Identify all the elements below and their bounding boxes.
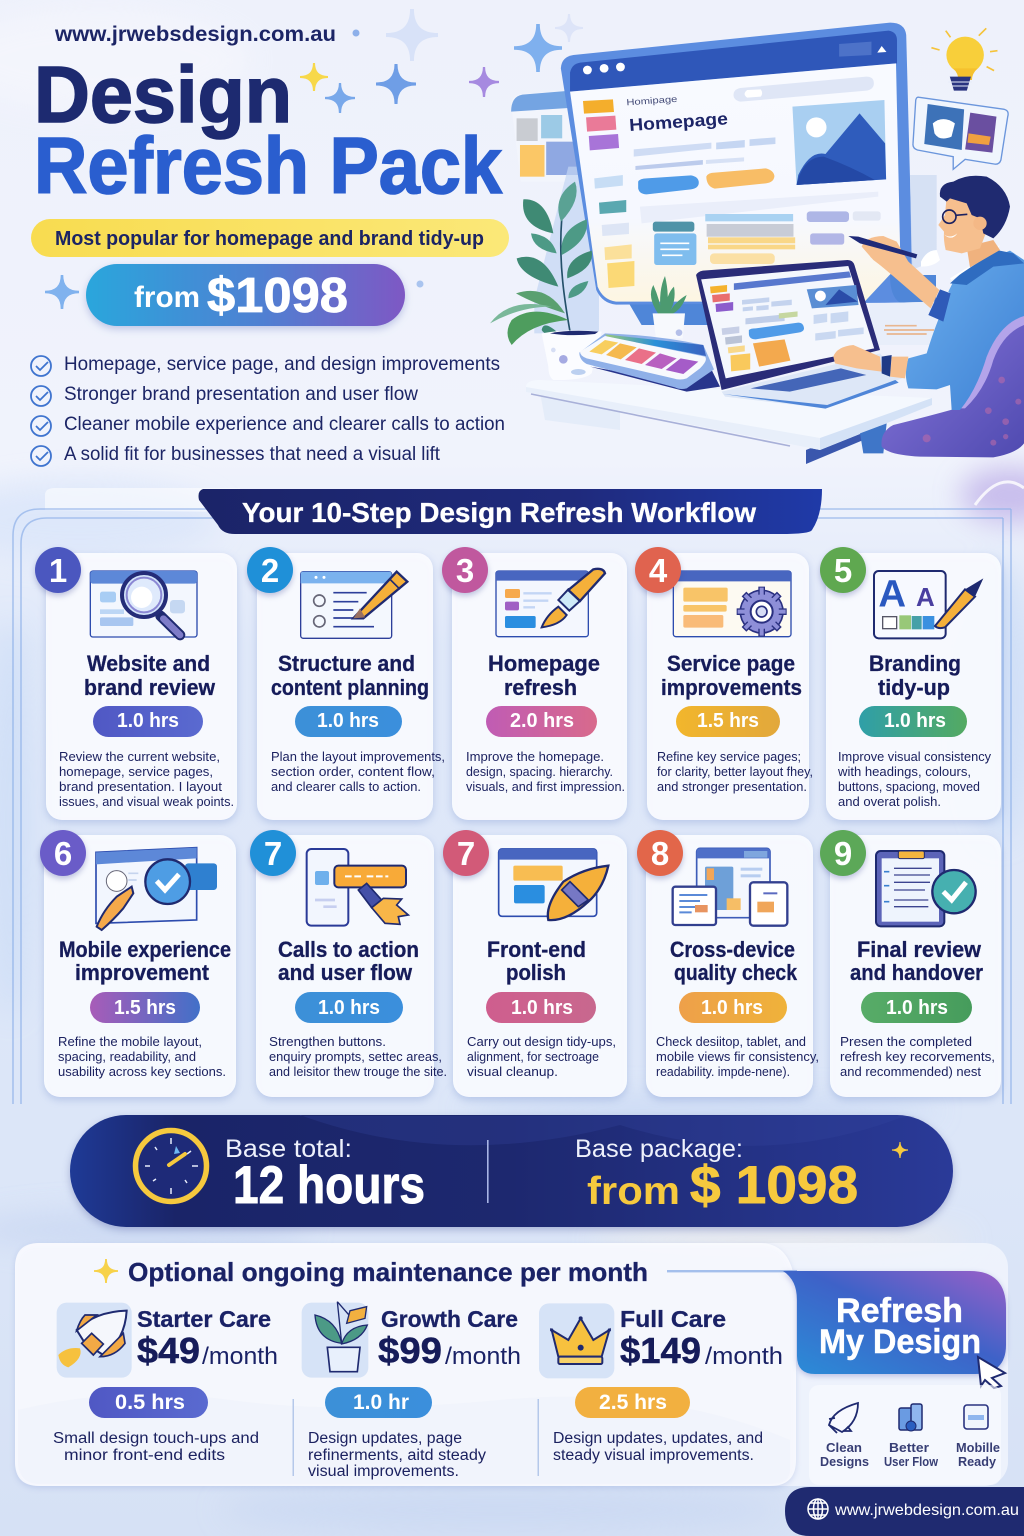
- card 2: content planning: [271, 675, 429, 700]
- card 1: issues, and visual weak points.: [59, 794, 234, 809]
- card 1: [35, 547, 237, 820]
- price pill: [86, 264, 405, 326]
- workflow banner: [198, 489, 822, 534]
- section heading: Optional ongoing maintenance per month: [128, 1257, 648, 1287]
- card 3: Homepage: [488, 651, 600, 676]
- card 3: design, spacing. hierarchy.: [466, 764, 613, 779]
- card 2: Plan the layout improvements,: [271, 749, 445, 764]
- plan: full care: Design updates, updates, and: [553, 1430, 763, 1447]
- plant: [490, 182, 592, 345]
- card 10: Final review: [857, 937, 982, 962]
- card 5: tidy-up: [878, 675, 950, 700]
- card 6: Refine the mobile layout,: [58, 1034, 202, 1049]
- monitor: Homipage: [626, 94, 678, 107]
- base total banner: Base total:: [225, 1135, 352, 1163]
- raised arm and pen: [870, 257, 939, 308]
- card 3: [442, 547, 627, 820]
- plan: full care: /month: [705, 1343, 783, 1370]
- card 5: Improve visual consistency: [838, 749, 991, 764]
- price pill: from: [134, 281, 200, 314]
- icon: cursor: [978, 1357, 1005, 1388]
- small plant: [651, 276, 687, 338]
- card 2: 1.0 hrs: [317, 710, 379, 732]
- icon: rocket: [57, 1303, 132, 1378]
- card 9: Check desiitop, tablet, and: [656, 1034, 806, 1049]
- feature: better user flow: Better: [889, 1440, 929, 1455]
- card 3: 2.0 hrs: [510, 710, 574, 732]
- desk: [526, 380, 932, 464]
- feature checklist: A solid fit for businesses that need a visual lift: [64, 444, 441, 465]
- feature: clean designs: [820, 1403, 869, 1469]
- plan: growth care: [302, 1302, 521, 1480]
- card 7: enquiry prompts, settec areas,: [269, 1049, 442, 1064]
- plan: growth care: 1.0 hr: [353, 1391, 409, 1414]
- base total banner: 12 hours: [233, 1156, 425, 1215]
- icon: clock: [136, 1130, 206, 1202]
- card 10: 9: [834, 835, 852, 872]
- card 6: improvement: [75, 960, 210, 985]
- card 10: and recommended) nest: [840, 1064, 981, 1079]
- speech bubble with app tiles: [913, 97, 1008, 169]
- body and shirt: [906, 251, 1024, 410]
- plant pot: [542, 330, 602, 380]
- icon: cross-device check: [673, 848, 787, 926]
- workflow panel frame: [13, 509, 1011, 1104]
- card 1: Website and: [87, 651, 210, 676]
- card 8: polish: [506, 960, 566, 985]
- icon: service page gear: [673, 571, 791, 637]
- card 8: [443, 830, 627, 1097]
- card 2: section order, content flow,: [271, 764, 435, 779]
- plan: growth care: $99: [378, 1330, 442, 1371]
- plan: starter care: 0.5 hrs: [115, 1391, 185, 1414]
- icon: front-end polish: [499, 849, 608, 920]
- icon: calls to action: [307, 849, 408, 926]
- card 7: 1.0 hrs: [318, 997, 380, 1019]
- card 1: brand presentation. I layout: [59, 779, 222, 794]
- designer in chair: [833, 176, 1024, 457]
- step cards row two: [40, 830, 1001, 1097]
- card 7: 7: [264, 835, 282, 872]
- chair: [860, 316, 1024, 457]
- plan: starter care: Starter Care: [137, 1306, 271, 1332]
- base total banner: [70, 1115, 953, 1227]
- card 9: 8: [651, 835, 669, 872]
- card 2: and clearer calls to action.: [271, 779, 421, 794]
- plan: growth care: Growth Care: [381, 1306, 518, 1332]
- footer website badge: www.jrwebdesign.com.au: [834, 1502, 1019, 1519]
- plan: starter care: minor front-end edits: [64, 1447, 225, 1464]
- card 10: refresh key recorvements,: [840, 1049, 995, 1064]
- icon: final review clipboard: [876, 851, 976, 926]
- card 4: [635, 547, 813, 820]
- laptop: [696, 260, 902, 409]
- card 2: Structure and: [278, 651, 415, 676]
- back window with colour tiles: [511, 90, 579, 182]
- icon: globe: [808, 1499, 828, 1519]
- card 9: [637, 830, 819, 1097]
- call to action button: [783, 1271, 1006, 1388]
- card 8: Front-end: [487, 937, 586, 962]
- card 8: Carry out design tidy-ups,: [467, 1034, 616, 1049]
- decorative sparkles: [45, 9, 583, 309]
- card 4: Service page: [667, 651, 795, 676]
- card 4: 4: [649, 552, 668, 589]
- call to action button: Refresh: [836, 1292, 963, 1330]
- card 5: Branding: [869, 651, 961, 676]
- card 3: 3: [456, 552, 474, 589]
- icon: crown: [539, 1303, 614, 1378]
- feature: better user flow: [884, 1404, 939, 1469]
- small paper note: [921, 250, 940, 267]
- card 6: Mobile experience: [59, 937, 231, 962]
- card 5: and overat polish.: [838, 794, 941, 809]
- head: [967, 240, 1000, 267]
- card 10: [820, 830, 1001, 1097]
- card 6: spacing, readability, and: [58, 1049, 196, 1064]
- card 7: Calls to action: [278, 937, 419, 962]
- feature: better user flow: User Flow: [884, 1454, 939, 1469]
- card 10: 1.0 hrs: [886, 997, 948, 1019]
- workflow banner: Your 10-Step Design Refresh Workflow: [242, 497, 756, 528]
- card 5: 1.0 hrs: [884, 710, 946, 732]
- card 9: 1.0 hrs: [701, 997, 763, 1019]
- plan: starter care: [53, 1303, 278, 1464]
- icon: homepage brush: [496, 569, 605, 637]
- icon: website review: [90, 571, 197, 637]
- feature checklist: [31, 354, 505, 466]
- card 4: and stronger presentation.: [657, 779, 807, 794]
- plan: growth care: Design updates, page: [308, 1430, 462, 1447]
- title: Refresh Pack: [34, 121, 502, 210]
- card 6: 1.5 hrs: [114, 997, 176, 1019]
- card 6: 6: [54, 835, 72, 872]
- plan: full care: $149: [620, 1330, 701, 1371]
- card 2: 2: [261, 552, 279, 589]
- card 5: buttons, spaciong, moved: [838, 779, 980, 794]
- card 1: 1.0 hrs: [117, 710, 179, 732]
- card 1: brand review: [84, 675, 216, 700]
- card 3: visuals, and first impression.: [466, 779, 625, 794]
- base total banner: Base package:: [575, 1135, 743, 1163]
- hero illustration: designer at desk: [490, 23, 1024, 464]
- items beside monitor: [869, 175, 937, 345]
- title: [34, 50, 502, 210]
- tagline pill: Most popular for homepage and brand tidy-up: [55, 228, 484, 250]
- card 5: [820, 547, 1001, 820]
- card 10: and handover: [850, 960, 983, 985]
- plan: starter care: /month: [202, 1343, 278, 1370]
- feature: clean designs: Designs: [820, 1454, 869, 1469]
- light bulb: [931, 28, 997, 91]
- card 7: Strengthen buttons.: [269, 1034, 386, 1049]
- resting hand and watch: [833, 345, 882, 372]
- card 7: and leisitor thew trouge the site.: [269, 1064, 447, 1079]
- feature checklist: Cleaner mobile experience and clearer calls to action: [64, 414, 505, 435]
- plan: starter care: $49: [137, 1330, 200, 1371]
- feature: mobile ready: [956, 1405, 1000, 1469]
- website address: www.jrwebsdesign.com.au: [54, 23, 336, 46]
- icon: mobile experience: [96, 848, 217, 930]
- icon: branding typography: A: [878, 573, 906, 616]
- card 4: for clarity, better layout fhey,: [657, 764, 813, 779]
- card 8: alignment, for sectroage: [467, 1049, 599, 1064]
- icon: structure planning: [301, 572, 407, 638]
- call to action button: My Design: [819, 1323, 981, 1361]
- title: Design: [34, 50, 292, 139]
- monitor: [561, 23, 913, 325]
- plan: full care: steady visual improvements.: [553, 1447, 754, 1464]
- card 8: visual cleanup.: [467, 1064, 558, 1079]
- plan: growth care: refinerments, aitd steady: [308, 1447, 486, 1464]
- card 1: Review the current website,: [59, 749, 220, 764]
- plan: full care: 2.5 hrs: [599, 1391, 667, 1414]
- card 3: Improve the homepage.: [466, 749, 604, 764]
- card 5: 5: [834, 552, 852, 589]
- colour palette tablet: [579, 333, 720, 392]
- plan: starter care: Small design touch-ups and: [53, 1430, 259, 1447]
- feature: mobile ready: Ready: [958, 1454, 997, 1469]
- step cards row one: [35, 547, 1001, 820]
- feature checklist: Stronger brand presentation and user flow: [64, 384, 418, 405]
- card 5: with headings, colours,: [837, 764, 971, 779]
- feature icons panel: [809, 1385, 1001, 1485]
- pale panel behind plant: [534, 167, 599, 333]
- base total banner: from: [587, 1170, 680, 1213]
- maintenance panel: [15, 1243, 1008, 1486]
- card 2: [247, 547, 445, 820]
- card 4: 1.5 hrs: [697, 710, 759, 732]
- feature: mobile ready: Mobille: [956, 1440, 1000, 1455]
- icon: branding typography: [874, 571, 983, 638]
- monitor: Homepage: [629, 108, 729, 135]
- card 8: 1.0 hrs: [511, 997, 573, 1019]
- plan: growth care: /month: [445, 1343, 521, 1370]
- plan: growth care: visual improvements.: [308, 1463, 459, 1480]
- card 3: refresh: [504, 675, 577, 700]
- card 4: improvements: [661, 675, 802, 700]
- card 9: Cross-device: [670, 937, 795, 962]
- card 9: quality check: [674, 960, 798, 985]
- price pill: $1098: [207, 269, 348, 323]
- feature checklist: Homepage, service page, and design improvements: [64, 354, 500, 375]
- card 4: Refine key service pages;: [657, 749, 801, 764]
- plan: full care: [539, 1303, 783, 1464]
- feature: clean designs: Clean: [826, 1440, 862, 1455]
- card 10: Presen the completed: [840, 1034, 972, 1049]
- card 1: 1: [49, 552, 67, 589]
- card 9: readability. impde-nene).: [656, 1064, 790, 1079]
- card 6: usability across key sections.: [58, 1064, 226, 1079]
- card 8: 7: [457, 835, 475, 872]
- plan: full care: Full Care: [620, 1306, 726, 1332]
- card 7: and user flow: [278, 960, 413, 985]
- card 6: [40, 830, 236, 1097]
- footer website badge: [785, 1487, 1024, 1536]
- base total banner: $ 1098: [690, 1156, 858, 1215]
- card 1: homepage, service pages,: [59, 764, 213, 779]
- tagline pill: [31, 219, 509, 257]
- icon: potted plant: [302, 1302, 368, 1378]
- card 7: [250, 830, 447, 1097]
- card 9: mobile views fir consistency,: [656, 1049, 819, 1064]
- icon: branding typography: A: [916, 582, 935, 612]
